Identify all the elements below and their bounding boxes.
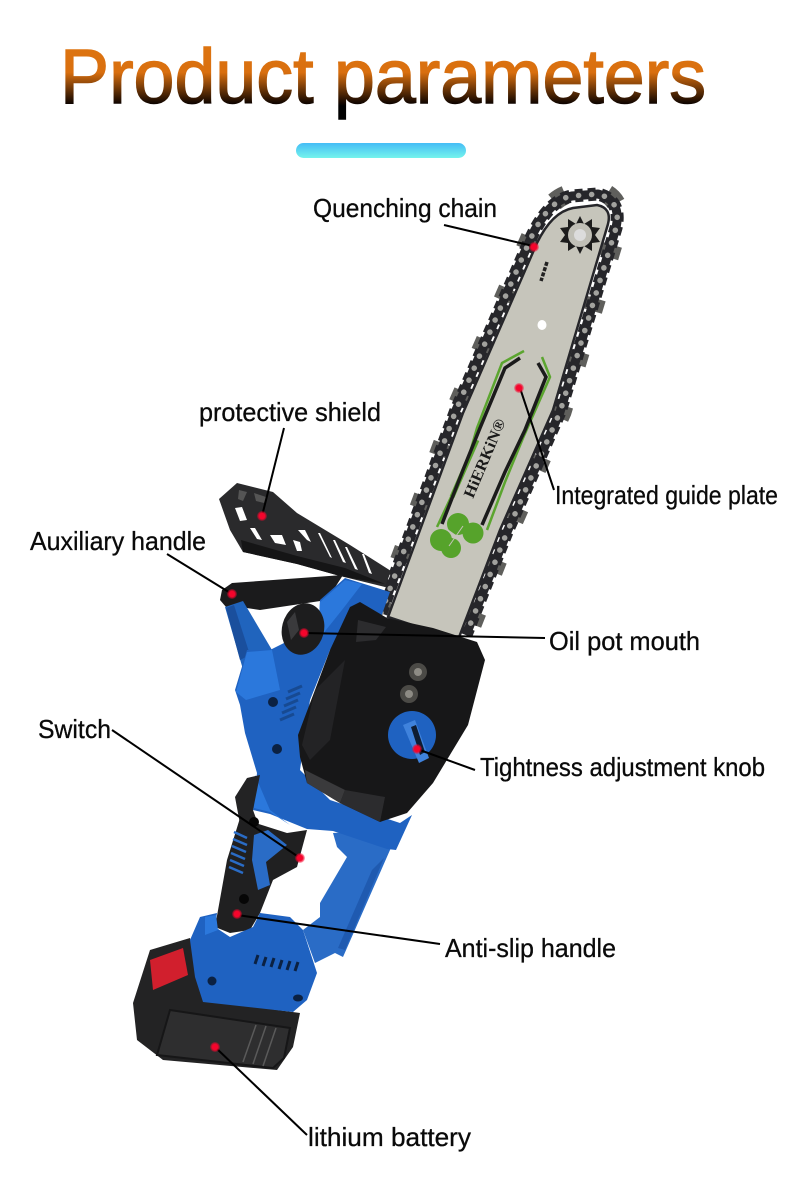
callout: anti-slip handle xyxy=(232,909,616,963)
title: Product parameters xyxy=(60,34,706,120)
auxiliary handle xyxy=(220,575,343,680)
callout: auxiliary handle: Auxiliary handle xyxy=(30,526,206,556)
protective shield xyxy=(219,483,391,587)
callout: oil pot mouth: Oil pot mouth xyxy=(549,626,700,656)
title underline bar xyxy=(296,143,466,158)
battery latch xyxy=(150,948,188,990)
callout: tightness adjustment knob: Tightness adjustment knob xyxy=(480,752,765,782)
chain cutter teeth xyxy=(380,190,619,635)
tightness adjustment knob xyxy=(388,711,436,763)
black gearbox case xyxy=(298,602,485,822)
callout: auxiliary handle xyxy=(30,526,237,599)
battery mount blue base xyxy=(190,913,317,1012)
bar hole xyxy=(538,320,546,330)
callout: protective shield xyxy=(199,397,381,521)
main blue body xyxy=(235,578,412,850)
callout: integrated guide plate xyxy=(514,383,778,510)
green decor lines xyxy=(437,351,524,527)
battery face xyxy=(157,1010,290,1068)
oil pot cap xyxy=(276,598,330,660)
callout: quenching chain: Quenching chain xyxy=(313,193,497,223)
small bar mark xyxy=(541,262,547,281)
clover logo xyxy=(430,513,484,558)
callout: lithium battery: lithium battery xyxy=(308,1122,471,1152)
sprocket xyxy=(560,216,600,254)
callout: switch xyxy=(38,714,305,863)
rear D-handle frame xyxy=(303,830,400,963)
chainsaw product illustration xyxy=(133,190,619,1070)
anti-slip grip xyxy=(215,775,307,933)
callout: quenching chain xyxy=(313,193,539,252)
chain bumps xyxy=(381,194,617,635)
guide plate xyxy=(388,205,609,640)
callout: lithium battery xyxy=(210,1042,471,1152)
callout: tightness adjustment knob xyxy=(412,744,765,782)
callout: protective shield: protective shield xyxy=(199,397,381,427)
guide bar and chain xyxy=(380,190,619,640)
callout: anti-slip handle: Anti-slip handle xyxy=(445,933,616,963)
chain rivets xyxy=(381,194,617,635)
black decor lines xyxy=(442,358,520,524)
callout: oil pot mouth xyxy=(299,626,700,656)
callout: switch: Switch xyxy=(38,714,111,744)
battery xyxy=(133,938,300,1070)
brand text: HiERKiN® xyxy=(461,417,510,501)
chain links xyxy=(381,194,617,635)
